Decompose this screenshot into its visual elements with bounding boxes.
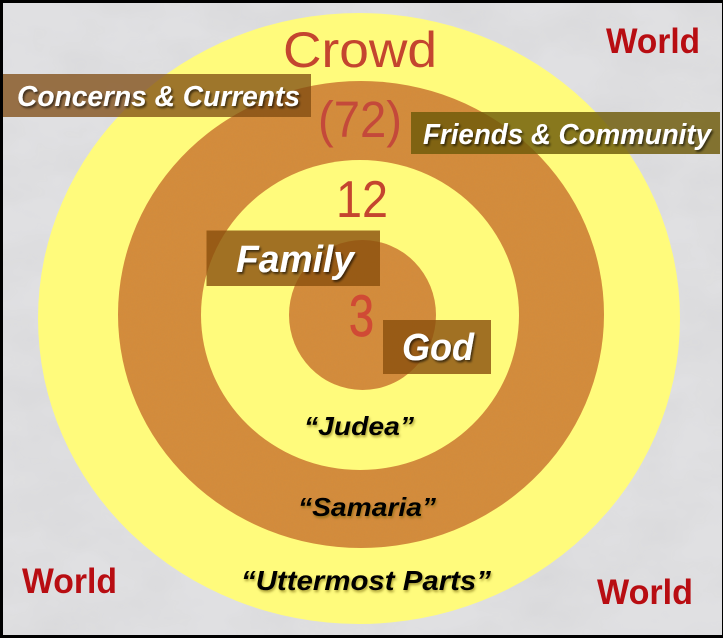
label: Judea: “Judea” bbox=[304, 411, 414, 441]
orange ring bbox=[118, 81, 604, 548]
label: (72): (72) bbox=[318, 91, 402, 148]
banner: Concerns & Currents: Concerns & Currents bbox=[17, 81, 300, 113]
inner yellow ring bbox=[201, 160, 519, 470]
banner: Family: Family bbox=[236, 239, 356, 281]
label: Uttermost Parts: “Uttermost Parts” bbox=[241, 565, 491, 596]
banner: God: God bbox=[402, 327, 475, 369]
banner: Family bbox=[206, 230, 380, 286]
label: 12: 12 bbox=[336, 171, 388, 229]
label: World bottom left: World bbox=[22, 562, 117, 601]
label: World top right: World bbox=[606, 22, 700, 61]
label: 3: 3 bbox=[349, 284, 374, 349]
banner: God bbox=[383, 320, 491, 374]
banner: Friends & Community: Friends & Community bbox=[423, 119, 713, 151]
center orange circle bbox=[289, 240, 436, 390]
label: World bottom right: World bbox=[597, 573, 693, 612]
label: Samaria: “Samaria” bbox=[298, 492, 436, 522]
label: Crowd: Crowd bbox=[283, 22, 437, 78]
